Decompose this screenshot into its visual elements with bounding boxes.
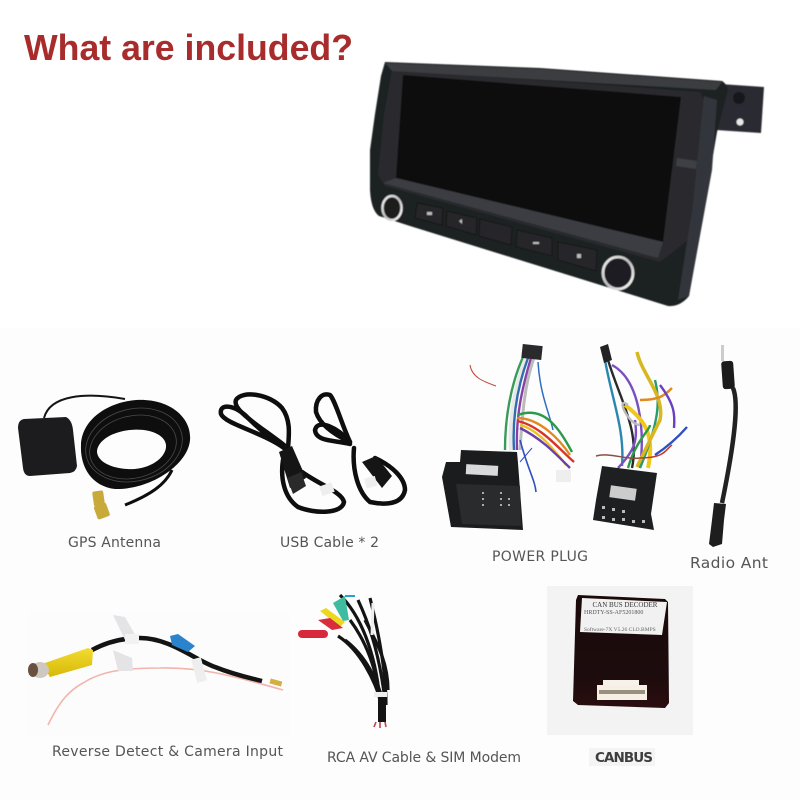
- CANBUS decoder: [547, 586, 693, 766]
- panel: [547, 586, 693, 735]
- left wires: [470, 355, 574, 492]
- title: What are included?: [24, 27, 353, 68]
- gold tip: [269, 679, 282, 686]
- cable: [722, 388, 736, 503]
- CANBUS decoder: CAN BUS DECODER: [593, 601, 658, 609]
- right connector: [593, 466, 657, 530]
- antenna block: [18, 417, 77, 476]
- label: USB Cable * 2: [280, 535, 379, 551]
- pink wire: [48, 668, 283, 725]
- radio antenna: [690, 345, 768, 572]
- left connector: [442, 450, 523, 530]
- antenna wire: [44, 396, 125, 418]
- left knob: [382, 196, 402, 220]
- button row: [415, 203, 597, 271]
- mounting bracket: [716, 84, 764, 133]
- sticker: [580, 598, 667, 635]
- head unit: [370, 62, 764, 306]
- label: Reverse Detect & Camera Input: [52, 744, 284, 760]
- RCA plugs: [298, 595, 355, 638]
- lower bezel strip: [383, 178, 663, 258]
- white tape: [113, 615, 207, 683]
- cable two: [315, 394, 405, 504]
- label: RCA AV Cable & SIM Modem: [327, 750, 521, 766]
- recess around the screen: [378, 70, 704, 262]
- CANBUS decoder: CANBUS: [595, 750, 653, 766]
- label: POWER PLUG: [492, 549, 588, 565]
- top plug: [721, 361, 735, 389]
- label: Radio Ant: [690, 554, 768, 572]
- side panel: [678, 96, 717, 300]
- label: [589, 748, 655, 766]
- label: GPS Antenna: [68, 535, 161, 551]
- button glyphs: [427, 212, 581, 258]
- photo backdrop: [28, 612, 290, 737]
- black cable: [92, 638, 262, 681]
- right knob: [603, 257, 633, 289]
- CANBUS decoder: HRDTY-SS-AF5201800: [584, 610, 643, 616]
- USB plug one: [279, 446, 335, 496]
- bottom plug: [709, 503, 726, 547]
- yellow RCA plug: [28, 648, 93, 678]
- connector: [597, 680, 647, 700]
- cable highlights: [78, 398, 190, 505]
- coiled cable: [81, 400, 190, 489]
- USB plug two: [362, 456, 392, 488]
- cable one: [221, 394, 344, 512]
- cable bundle: [338, 595, 388, 722]
- gold connector: [92, 490, 110, 520]
- USB cables: [221, 394, 405, 551]
- unit body: [370, 62, 727, 306]
- screen: [396, 75, 681, 242]
- RCA AV cable and SIM modem: [298, 595, 521, 766]
- power plug: [442, 344, 687, 565]
- reverse detect and camera input: [28, 612, 290, 760]
- blue connector: [170, 634, 195, 652]
- top edge highlight: [385, 63, 722, 90]
- box body: [573, 595, 669, 708]
- lower section background: [0, 328, 800, 800]
- right wires: [596, 352, 687, 468]
- GPS antenna: [18, 396, 190, 551]
- CANBUS decoder: Software-7X V5.26 CLO.BMPS: [584, 626, 656, 633]
